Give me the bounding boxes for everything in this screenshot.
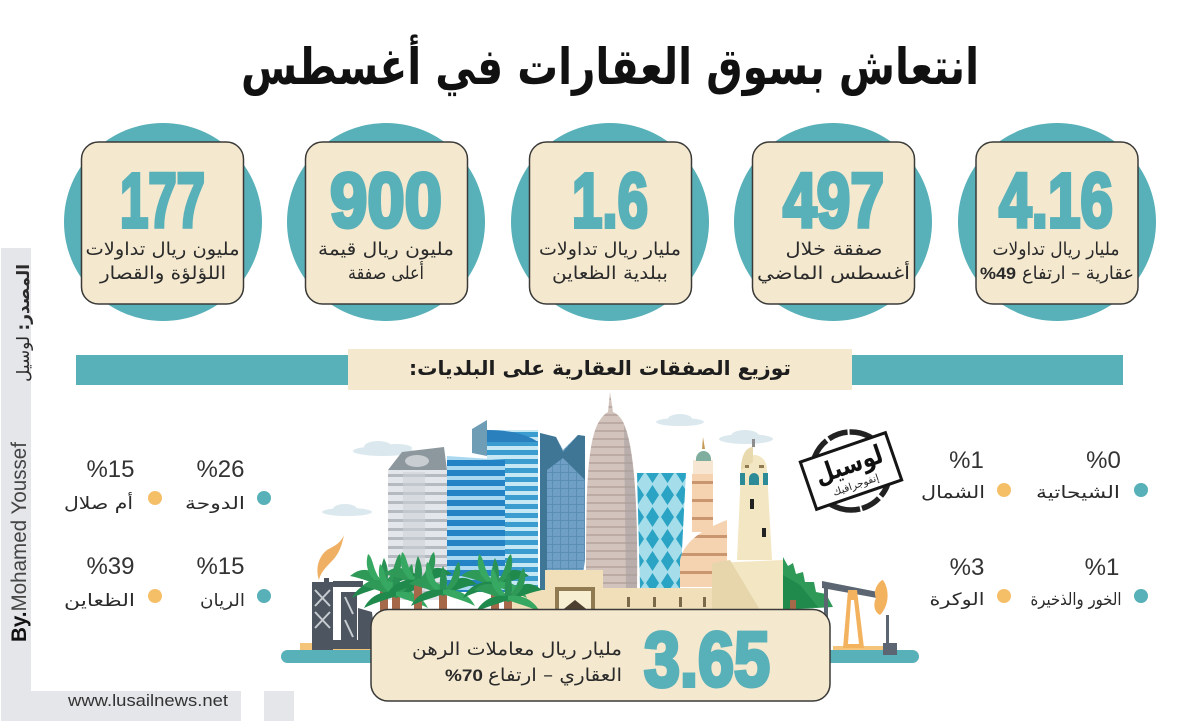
stat value: 1.6 — [572, 158, 648, 244]
stat description: مليون ريال تداولات — [86, 239, 240, 260]
stat description — [980, 239, 1134, 284]
stat card: 1.6 billion — [511, 123, 709, 321]
legend item: Rayyan: الريان — [200, 591, 245, 611]
legend item: Shahaniya — [1036, 447, 1148, 503]
stat description — [318, 239, 454, 284]
stat value: 177 — [120, 158, 205, 244]
right oil pump — [822, 580, 897, 655]
title: انتعاش بسوق العقارات في أغسطس — [241, 34, 979, 97]
author credit: By.Mohamed Youssef — [8, 442, 31, 642]
diamond glass tower — [637, 473, 686, 588]
right palm — [783, 557, 833, 612]
stat card: 4.16 billion — [958, 123, 1156, 321]
dark angular tower — [540, 433, 585, 590]
legend item: Rayyan — [196, 553, 271, 611]
stat description: مليار ريال تداولات — [539, 239, 681, 260]
spiral mosque minaret — [680, 437, 727, 587]
stat description: عقارية – ارتفاع — [1022, 263, 1134, 284]
ground water — [281, 650, 919, 663]
front blue tower — [447, 456, 505, 592]
callout: mortgage transactions — [371, 610, 830, 703]
legend item: Rayyan: %15 — [196, 553, 245, 580]
stat description: أعلى صفقة — [348, 261, 424, 284]
legend item: Al Khor — [1030, 554, 1148, 610]
stat description — [757, 239, 910, 284]
footer strip: website: www.lusailnews.net — [67, 691, 228, 710]
fort wall — [505, 570, 712, 612]
side strip: source and author credits — [1, 248, 34, 721]
rear blue tower — [487, 430, 538, 592]
legend item: Umm Salal: %15 — [86, 456, 135, 483]
grey tower — [388, 470, 447, 600]
legend item: Al Khor: الخور والذخيرة — [1030, 590, 1122, 610]
stat description: ببلدية الظعاين — [552, 263, 668, 284]
stat card: 900 million — [287, 123, 485, 321]
stat card: 497 deals — [734, 123, 932, 321]
stat card: 177 million — [64, 123, 262, 321]
legend item: Wakra — [930, 554, 1011, 610]
source credit: المصدر: لوسيل — [14, 264, 34, 382]
stat description: أغسطس الماضي — [757, 261, 910, 284]
stat description: اللؤلؤة والقصار — [99, 263, 226, 284]
left oil rig — [312, 578, 375, 650]
legend item: Shamal: %1 — [949, 447, 984, 474]
footer strip: website — [31, 691, 294, 721]
legend item: Wakra: %3 — [950, 554, 984, 581]
cream minaret — [712, 439, 783, 610]
legend item: Umm Salal: أم صلال — [64, 492, 133, 514]
callout value: 3.65 — [644, 617, 770, 703]
legend item: Shamal: الشمال — [921, 483, 985, 503]
illustration: Doha skyline — [281, 392, 919, 663]
legend item: Doha — [185, 456, 271, 514]
legend item: Umm Salal — [64, 456, 162, 514]
stat description: %49 — [980, 264, 1016, 283]
stat value: 497 — [783, 158, 884, 244]
stamp subtitle: إنفوجرافيك — [832, 473, 881, 499]
callout description: %70 — [445, 666, 483, 685]
stat description — [86, 239, 240, 284]
section band — [76, 355, 1123, 385]
section heading: توزيع الصفقات العقارية على البلديات: — [409, 356, 791, 380]
stat description — [539, 239, 681, 284]
palm trees — [350, 552, 542, 630]
stat description: صفقة خلال — [786, 239, 882, 260]
callout description — [412, 639, 622, 686]
clouds — [322, 414, 773, 516]
legend item: Shahaniya: %0 — [1086, 447, 1121, 474]
legend item: Al Khor: %1 — [1085, 554, 1119, 581]
stat description: مليار ريال تداولات — [992, 239, 1120, 260]
stamp: Lusail infographic — [796, 419, 906, 523]
callout description: العقاري – ارتفاع — [488, 665, 622, 686]
legend item: Doha: %26 — [196, 456, 245, 483]
stat description: مليون ريال قيمة — [318, 239, 454, 260]
legend item: Daayen: الظعاين — [64, 591, 135, 611]
legend item: Daayen — [64, 553, 162, 611]
stat value: 4.16 — [999, 158, 1113, 244]
stamp wordmark: لوسيل — [811, 440, 887, 491]
callout description: مليار ريال معاملات الرهن — [412, 639, 622, 660]
legend item: Wakra: الوكرة — [930, 590, 984, 610]
legend item: Shahaniya: الشيحاتية — [1036, 483, 1120, 503]
stat value: 900 — [330, 158, 442, 244]
legend item: Daayen: %39 — [86, 553, 135, 580]
Doha tower — [586, 392, 637, 590]
legend item: Doha: الدوحة — [185, 494, 245, 514]
flare flame — [317, 535, 344, 580]
legend item: Shamal — [921, 447, 1011, 503]
section heading — [348, 349, 852, 390]
